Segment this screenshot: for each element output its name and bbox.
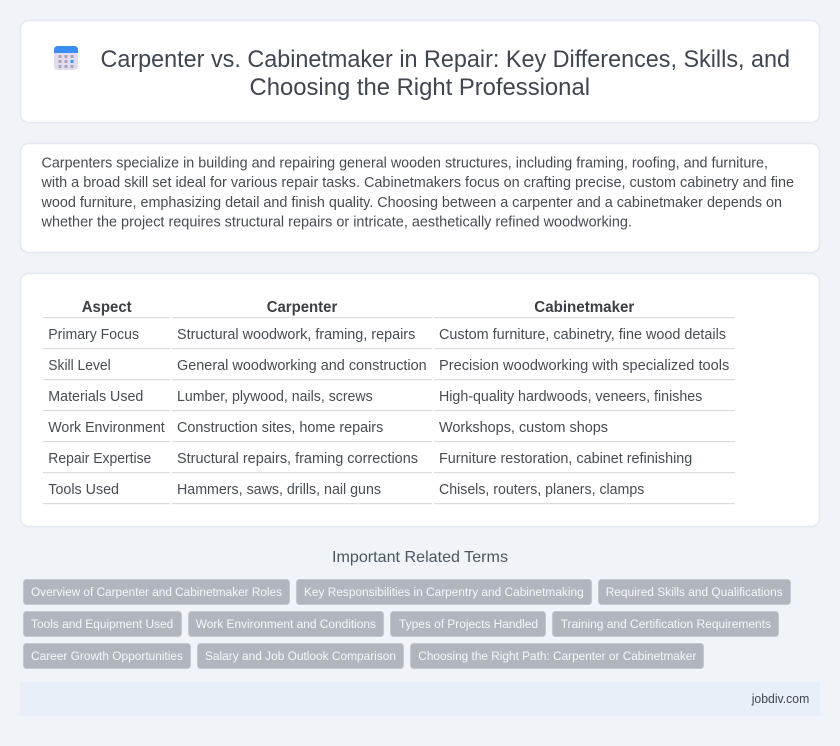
icon: calendar [54, 46, 78, 70]
table row: repair expertise: Repair Expertise [48, 451, 151, 467]
table row: tools used [43, 482, 735, 504]
footer [20, 682, 820, 716]
tag: career growth: Career Growth Opportunities [31, 649, 183, 663]
text block: summary paragraph: wood furniture, emphasizing detail and finish quality. Choosing between a carpenter and a cabinetmaker depends on [41, 195, 782, 211]
tag: salary [198, 644, 404, 668]
table row: skill level: Skill Level [48, 358, 111, 374]
table row: tools used: Tools Used [48, 482, 119, 498]
tag: responsibilities [296, 580, 592, 604]
table header: Aspect [82, 299, 132, 316]
tag: projects: Types of Projects Handled [399, 617, 538, 631]
table row: repair expertise [43, 451, 735, 473]
panel: summary [20, 144, 820, 252]
table row: materials used: Lumber, plywood, nails, screws [177, 389, 373, 405]
table row: repair expertise: Furniture restoration, cabinet refinishing [439, 451, 692, 467]
table row: primary focus: Custom furniture, cabinetry, fine wood details [439, 327, 726, 343]
table row: skill level: General woodworking and construction [177, 358, 427, 374]
tag: work environment: Work Environment and Conditions [196, 617, 376, 631]
table row: work environment: Construction sites, home repairs [177, 420, 383, 436]
table row: work environment [43, 420, 735, 442]
tag: choosing path: Choosing the Right Path: Carpenter or Cabinetmaker [418, 649, 696, 663]
table row: materials used: High-quality hardwoods, veneers, finishes [439, 389, 702, 405]
tag: overview [24, 580, 290, 604]
heading: related terms: Important Related Terms [332, 549, 508, 566]
tag: skills [598, 580, 790, 604]
text block: summary paragraph: Carpenters specialize in building and repairing general wooden structures, including framing, roofing, and furniture, [42, 156, 768, 172]
text block: summary paragraph: whether the project requires structural repairs or intricate, aesthetically refined woodworking. [40, 214, 632, 230]
table row: materials used: Materials Used [48, 389, 143, 405]
tag: projects [390, 612, 546, 636]
title: Carpenter vs. Cabinetmaker in Repair: Key Differences, Skills, and [100, 46, 790, 73]
table header [43, 299, 735, 318]
tag: choosing path [410, 644, 704, 668]
table header: Cabinetmaker [534, 299, 634, 316]
table row: materials used [43, 389, 735, 411]
footer source text: jobdiv.com [751, 692, 809, 706]
table row: primary focus: Primary Focus [48, 327, 139, 343]
title [100, 46, 790, 101]
tag: training [552, 612, 778, 636]
table row: primary focus [43, 327, 735, 349]
text block: summary paragraph: with a broad skill set ideal for various repair tasks. Cabinetmakers focus on crafting precise, custom cabinetry and fine [40, 175, 794, 191]
panel: related term tags [24, 580, 790, 668]
panel: comparison table [20, 274, 820, 526]
tag: skills: Required Skills and Qualifications [606, 585, 783, 599]
table header: Carpenter [267, 299, 337, 316]
tag: tools: Tools and Equipment Used [31, 617, 173, 631]
text block: summary paragraph [40, 156, 794, 230]
tag: salary: Salary and Job Outlook Comparison [205, 649, 396, 663]
table row: work environment: Workshops, custom shops [439, 420, 608, 436]
tag: work environment [188, 612, 384, 636]
table row: skill level: Precision woodworking with specialized tools [439, 358, 729, 374]
table row: repair expertise: Structural repairs, framing corrections [177, 451, 418, 467]
table row: tools used: Hammers, saws, drills, nail guns [177, 482, 381, 498]
tag: tools [24, 612, 182, 636]
panel: title card [20, 20, 820, 122]
table row: tools used: Chisels, routers, planers, clamps [439, 482, 644, 498]
table row: primary focus: Structural woodwork, framing, repairs [177, 327, 415, 343]
tag: career growth [24, 644, 190, 668]
tag: training: Training and Certification Requirements [561, 617, 771, 631]
title: Choosing the Right Professional [250, 74, 590, 101]
tag: overview: Overview of Carpenter and Cabinetmaker Roles [31, 585, 282, 599]
table row: skill level [43, 358, 735, 380]
tag: responsibilities: Key Responsibilities in Carpentry and Cabinetmaking [304, 585, 584, 599]
table row: work environment: Work Environment [48, 420, 165, 436]
